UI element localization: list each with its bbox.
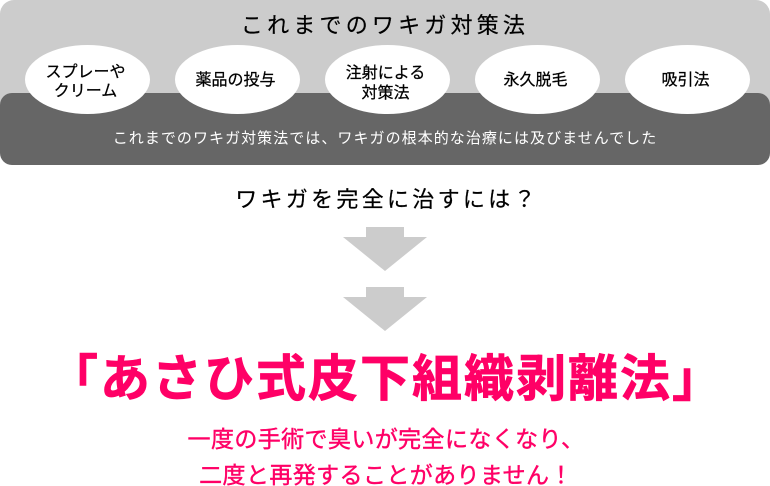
arrow: first down arrow (343, 227, 427, 271)
panel background: light (0, 0, 770, 165)
question heading: ワキガを完全に治すには？ (235, 187, 539, 212)
ellipse: suction (625, 45, 750, 114)
ellipse: spray and cream (25, 45, 150, 114)
ellipse: injection: 注射による (346, 64, 425, 82)
panel: conventional treatments (0, 0, 770, 165)
panel note: これまでのワキガ対策法では、ワキガの根本的な治療には及びませんでした (113, 130, 657, 147)
panel heading: これまでのワキガ対策法 (241, 13, 529, 38)
ellipse: spray and cream: スプレーや (45, 64, 126, 80)
ellipse: spray and cream: クリーム (54, 82, 117, 100)
ellipse: suction: 吸引法 (661, 72, 710, 89)
arrow: second down arrow (343, 287, 427, 331)
main title: method name: 「あさひ式皮下組織剥離法」 (48, 351, 724, 407)
ellipse: injection (325, 45, 450, 114)
result statement: 一度の手術で臭いが完全になくなり、 (188, 426, 584, 452)
result statement (188, 426, 584, 486)
ellipse: medication (175, 45, 300, 114)
panel background: dark (0, 93, 770, 165)
ellipse: permanent hair removal (475, 45, 600, 114)
ellipse: permanent hair removal: 永久脱毛 (503, 72, 568, 89)
ellipse: medication: 薬品の投与 (195, 72, 276, 89)
ellipse: injection: 対策法 (361, 84, 410, 102)
